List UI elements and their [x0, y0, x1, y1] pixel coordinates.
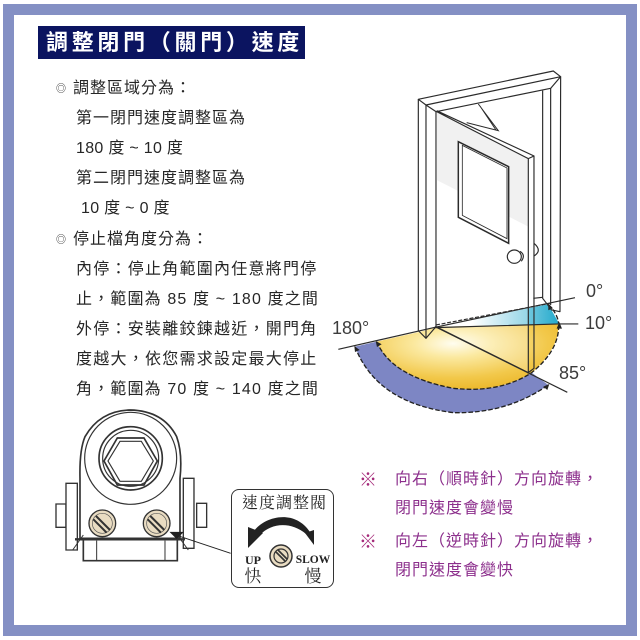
label: 85 degrees: 85° — [559, 363, 586, 383]
heading: stop angle: ◎ — [56, 235, 67, 246]
line: first zone: 第一閉門速度調整區為 — [76, 110, 246, 127]
line: inner stop: 內停：停止角範圍內任意將門停 — [76, 261, 318, 278]
door leaf — [437, 112, 528, 373]
text block: adjustment zones — [56, 79, 246, 217]
line 2: 閉門速度會變快 — [395, 562, 514, 579]
note: turn right — [359, 470, 599, 517]
left adjusting screw — [89, 510, 116, 537]
swing arcs — [355, 304, 559, 413]
line: inner stop range: 止，範圍為 85 度 ~ 180 度之間 — [76, 291, 319, 308]
curved arrow — [248, 517, 314, 548]
circular rings — [85, 412, 177, 504]
pointer — [171, 532, 231, 553]
line 1: 向左（逆時針）方向旋轉， — [395, 533, 599, 550]
heading: adjustment zones: 調整區域分為： — [73, 80, 192, 97]
note: turn left — [359, 532, 599, 579]
label: 10 degrees: 10° — [585, 313, 612, 333]
base — [83, 539, 177, 561]
line: second zone: 第二閉門速度調整區為 — [76, 170, 246, 187]
label: up fast: 快 — [244, 567, 262, 586]
angle lines — [338, 298, 578, 392]
heading: stop angle: 停止檔角度分為： — [73, 231, 209, 248]
door swing: purple band — [355, 342, 548, 413]
label: slow — [296, 554, 330, 586]
line: outer stop: 外停：安裝離鉸鍊越近，開門角 — [76, 321, 318, 338]
label: slow: 慢 — [304, 567, 322, 586]
door knob — [507, 250, 521, 263]
label: slow: SLOW — [296, 554, 330, 566]
label: up fast — [244, 553, 262, 586]
line 2: 閉門速度會變慢 — [395, 500, 514, 517]
line: 180 to 10 degrees: 180 度 ~ 10 度 — [76, 140, 183, 157]
line: 10 to 0 degrees: 10 度 ~ 0 度 — [81, 200, 170, 217]
small screw icon — [269, 544, 293, 568]
symbol: ※ — [359, 470, 378, 490]
label: up fast: UP — [245, 553, 261, 567]
door closer arm — [467, 104, 498, 131]
callout heading: 速度調整閥 — [242, 495, 327, 512]
label: 0 degrees: 0° — [586, 281, 603, 301]
line 1: 向右（順時針）方向旋轉， — [395, 471, 599, 488]
door swing: cyan area — [435, 304, 559, 327]
heading: adjustment zones: ◎ — [56, 84, 67, 95]
side bolts — [56, 478, 207, 550]
body — [80, 410, 181, 538]
door frame — [418, 71, 561, 338]
hex socket — [104, 438, 157, 485]
label: 180 degrees: 180° — [332, 318, 369, 338]
door swing: yellow area — [377, 324, 558, 389]
symbol: ※ — [359, 532, 378, 552]
right adjusting screw — [143, 510, 170, 537]
callout: speed valve — [231, 489, 334, 588]
title: 調整閉門（關門）速度 — [46, 30, 303, 55]
door window — [458, 142, 509, 243]
line: outer stop range: 角，範圍為 70 度 ~ 140 度之間 — [76, 381, 319, 398]
arrowheads — [354, 304, 562, 390]
line: outer stop detail: 度越大，依您需求設定最大停止 — [76, 351, 318, 368]
text block: stop angle — [56, 230, 319, 398]
